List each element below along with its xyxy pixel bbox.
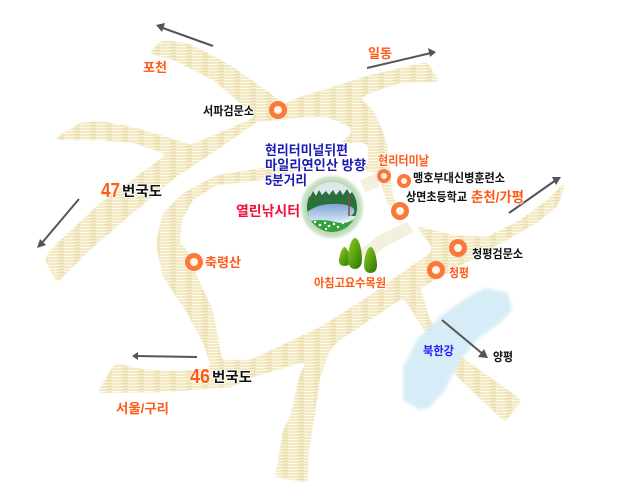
arrow: to 포천 <box>156 23 213 46</box>
arrow: to 47 south <box>37 199 79 248</box>
marker: 맹호부대신병훈련소 <box>399 176 409 186</box>
river: 북한강 <box>403 288 512 410</box>
label: 양평: 양평 <box>493 350 513 364</box>
label: 46번국도: 번국도 <box>212 369 252 385</box>
label: 46번국도 <box>190 366 252 388</box>
label: 맹호부대신병훈련소: 맹호부대신병훈련소 <box>413 171 505 185</box>
arrow: to 춘천/가평 <box>509 177 561 213</box>
icon: fishing lake picture <box>298 173 366 241</box>
marker: 축령산 <box>188 256 200 268</box>
note: directions to 열린낚시터: 현리터미널뒤편 <box>265 143 348 158</box>
label: 현리터미날: 현리터미날 <box>378 153 429 168</box>
road: pale connector to 아침고요수목원 <box>360 222 414 262</box>
note: directions to 열린낚시터: 5분거리 <box>265 173 307 188</box>
label: 청평: 청평 <box>449 265 469 280</box>
road network <box>46 40 565 482</box>
note: directions to 열린낚시터 <box>265 143 366 188</box>
arrow: to 서울/구리 <box>132 352 197 360</box>
label: 포천: 포천 <box>143 60 167 75</box>
label: 아침고요수목원: 아침고요수목원 <box>314 275 386 290</box>
label: 서파검문소: 서파검문소 <box>203 104 254 118</box>
marker: 청평 <box>430 264 442 276</box>
arrow: to 일동 <box>367 48 436 68</box>
label: 춘천/가평: 춘천/가평 <box>471 189 524 205</box>
label: 축령산: 축령산 <box>205 255 241 270</box>
label: 47번국도: 번국도 <box>122 183 162 199</box>
marker: 현리터미날 <box>379 171 389 181</box>
label: 청평검문소: 청평검문소 <box>472 246 523 261</box>
label: 47번국도: 47 <box>101 180 120 202</box>
label: 열린낚시터: 열린낚시터 <box>236 203 300 219</box>
marker: 서파검문소 <box>272 104 284 116</box>
label: 상면초등학교: 상면초등학교 <box>406 189 467 204</box>
road: pale connector to 현리터미날 <box>360 172 379 192</box>
label: 47번국도 <box>101 180 162 202</box>
label: 북한강: 북한강 <box>423 343 454 358</box>
marker: 청평검문소 <box>452 242 464 254</box>
label: 일동: 일동 <box>368 46 392 61</box>
text backing behind the blue note <box>263 143 368 167</box>
arrow: to 양평 <box>442 320 488 358</box>
note: directions to 열린낚시터: 마일리연인산 방향 <box>265 158 366 173</box>
label: 46번국도: 46 <box>190 366 210 388</box>
marker: 상면초등학교 <box>394 204 406 218</box>
icon: trees of 아침고요수목원 <box>339 238 377 273</box>
label: 서울/구리: 서울/구리 <box>116 401 169 416</box>
